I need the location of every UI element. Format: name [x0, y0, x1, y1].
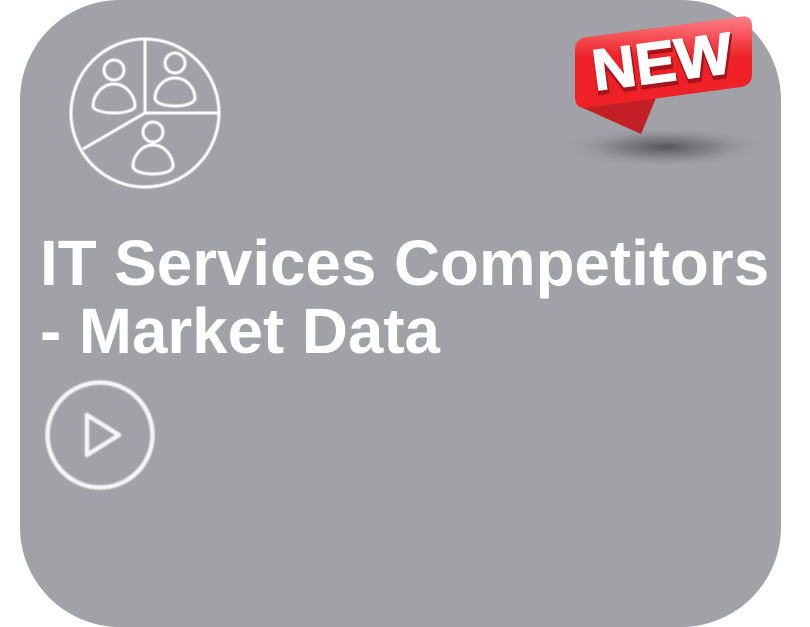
badge: NEW ribbon: [560, 16, 770, 168]
badge tail: [583, 98, 656, 134]
badge shadow: [560, 126, 770, 168]
badge text: NEW: [588, 20, 736, 103]
icon: pie chart with people: [71, 39, 219, 187]
title: - Market Data: [40, 296, 440, 367]
icon: play button: [48, 382, 152, 488]
badge text: NEW: [589, 23, 737, 107]
title: [40, 228, 769, 367]
title: IT Services Competitors: [40, 228, 769, 299]
badge body: [575, 16, 752, 108]
